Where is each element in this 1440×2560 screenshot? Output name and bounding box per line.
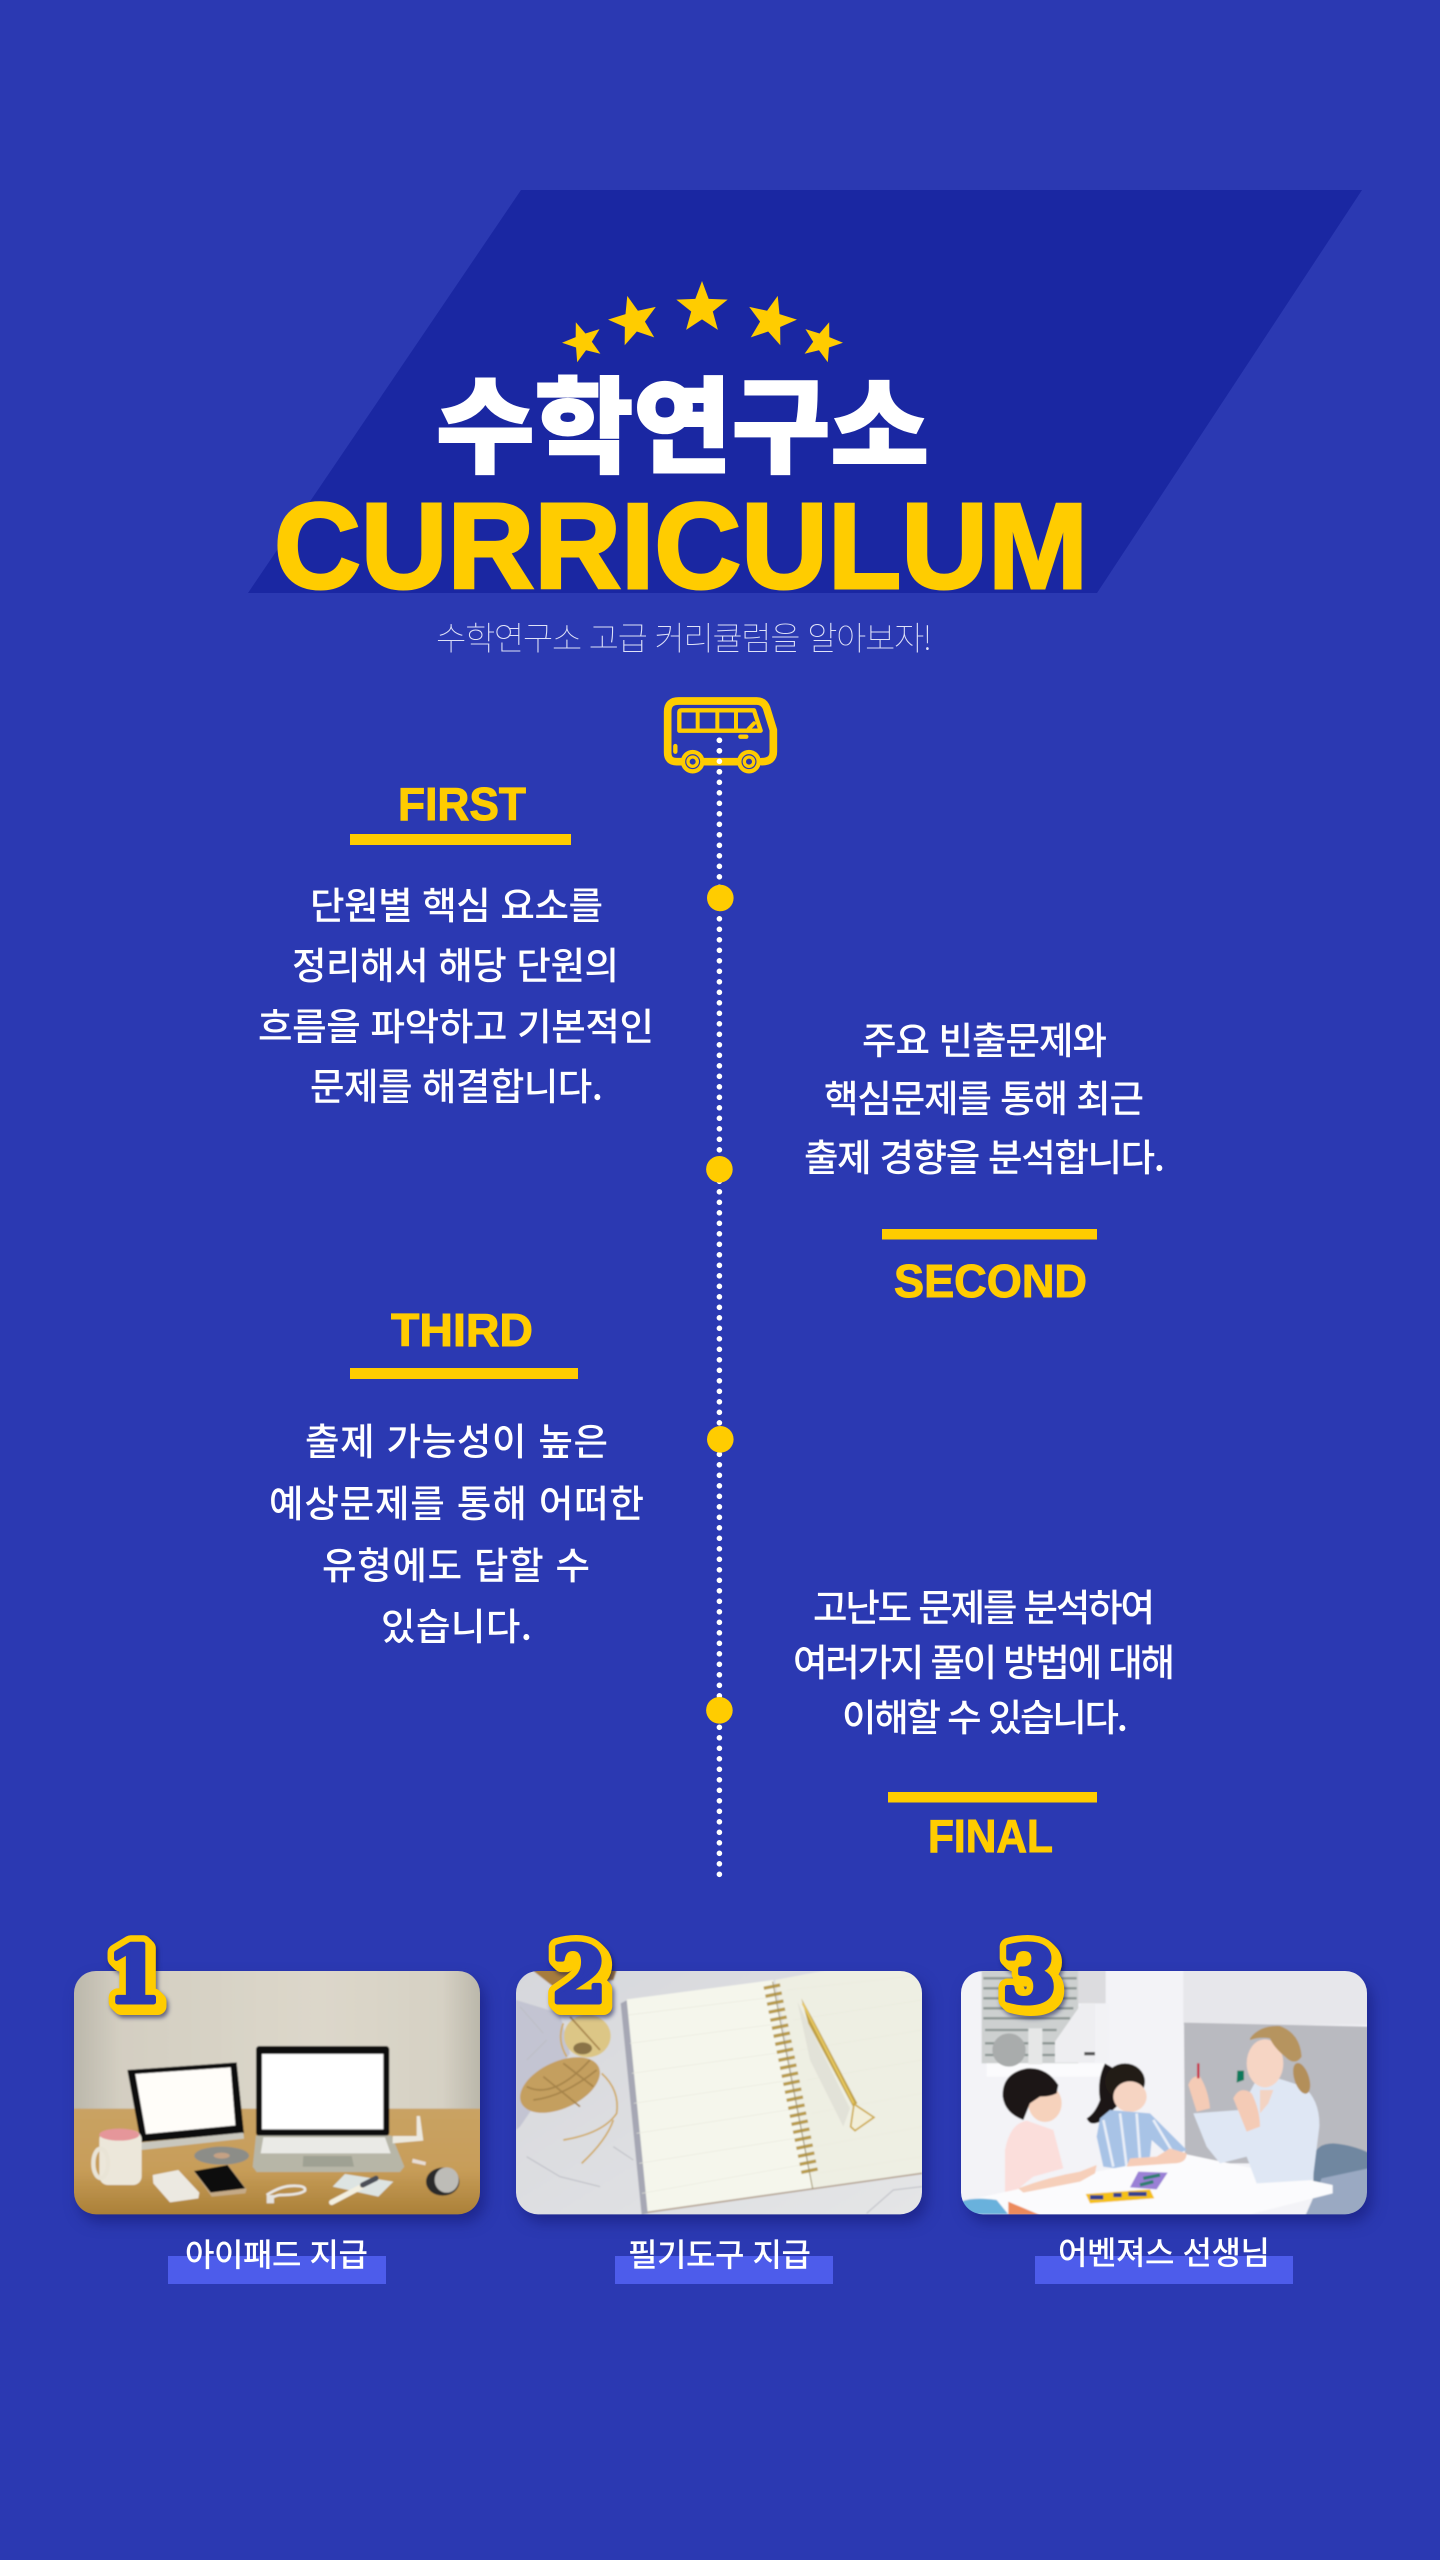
card 3: classroom photo	[957, 1967, 1373, 2219]
label highlight	[168, 2256, 386, 2284]
body text: 출제 경향을 분석합니다.	[804, 1127, 1165, 1182]
label: 필기도구 지급	[615, 2230, 833, 2284]
panel: final	[793, 1577, 1175, 1862]
icon: bus	[668, 701, 773, 771]
label highlight	[615, 2256, 833, 2284]
body text: 유형에도 답할 수	[322, 1535, 590, 1590]
body text	[269, 1411, 644, 1651]
number badge 3: 3	[1002, 1930, 1056, 2021]
heading: FIRST: FIRST	[398, 778, 526, 830]
label: 어벤져스 선생님	[1035, 2228, 1293, 2284]
label text: 어벤져스 선생님	[1058, 2228, 1270, 2274]
body text	[804, 1010, 1165, 1182]
underline bar	[888, 1792, 1097, 1802]
body text: 예상문제를 통해 어떠한	[269, 1473, 644, 1528]
number badge 3: 3	[1002, 1930, 1056, 2021]
body text: 이해할 수 있습니다.	[842, 1687, 1128, 1742]
body text: 있습니다.	[381, 1596, 532, 1651]
heading: SECOND: SECOND	[894, 1255, 1087, 1307]
panel: second	[804, 1010, 1165, 1307]
number badge 1: 1	[107, 1930, 161, 2021]
underline bar	[350, 1368, 578, 1379]
title: 수학연구소: 수학연구소	[436, 343, 929, 494]
timeline marker 1	[707, 885, 734, 911]
header banner parallelogram	[248, 190, 1362, 593]
timeline marker 2	[706, 1156, 733, 1183]
body text: 핵심문제를 통해 최근	[824, 1068, 1144, 1123]
timeline: dotted line	[717, 740, 722, 1876]
title: CURRICULUM: CURRICULUM	[274, 478, 1088, 614]
panel: first	[258, 778, 654, 1111]
card 1: tablet photo	[70, 1967, 483, 2219]
body text: 정리해서 해당 단원의	[292, 935, 619, 990]
subtitle: 수학연구소 고급 커리큘럼을 알아보자!	[436, 612, 932, 660]
timeline: white dots over bus	[717, 740, 722, 772]
number badge 1: 1	[107, 1930, 161, 2021]
body text: 출제 가능성이 높은	[305, 1411, 608, 1466]
label highlight	[1035, 2256, 1293, 2284]
body text: 단원별 핵심 요소를	[310, 875, 603, 930]
underline bar	[350, 834, 571, 845]
body text: 문제를 해결합니다.	[310, 1056, 603, 1111]
timeline marker 3	[707, 1426, 734, 1453]
heading: THIRD: THIRD	[391, 1304, 533, 1356]
label text: 필기도구 지급	[628, 2230, 811, 2276]
body text: 여러가지 풀이 방법에 대해	[793, 1632, 1175, 1687]
body text: 흐름을 파악하고 기본적인	[258, 996, 654, 1051]
body text	[258, 875, 654, 1111]
panel: third	[269, 1304, 644, 1651]
timeline marker 4	[706, 1697, 733, 1724]
underline bar	[882, 1229, 1097, 1240]
body text: 고난도 문제를 분석하여	[813, 1577, 1155, 1632]
label: 아이패드 지급	[168, 2230, 386, 2284]
label text: 아이패드 지급	[185, 2230, 368, 2276]
number badge 2: 2	[552, 1930, 606, 2021]
number badge 2: 2	[552, 1930, 606, 2021]
icon: five stars	[557, 281, 848, 365]
heading: FINAL: FINAL	[928, 1810, 1053, 1862]
body text	[793, 1577, 1175, 1742]
body text: 주요 빈출문제와	[862, 1010, 1107, 1065]
card 2: notebook photo	[510, 1967, 927, 2219]
